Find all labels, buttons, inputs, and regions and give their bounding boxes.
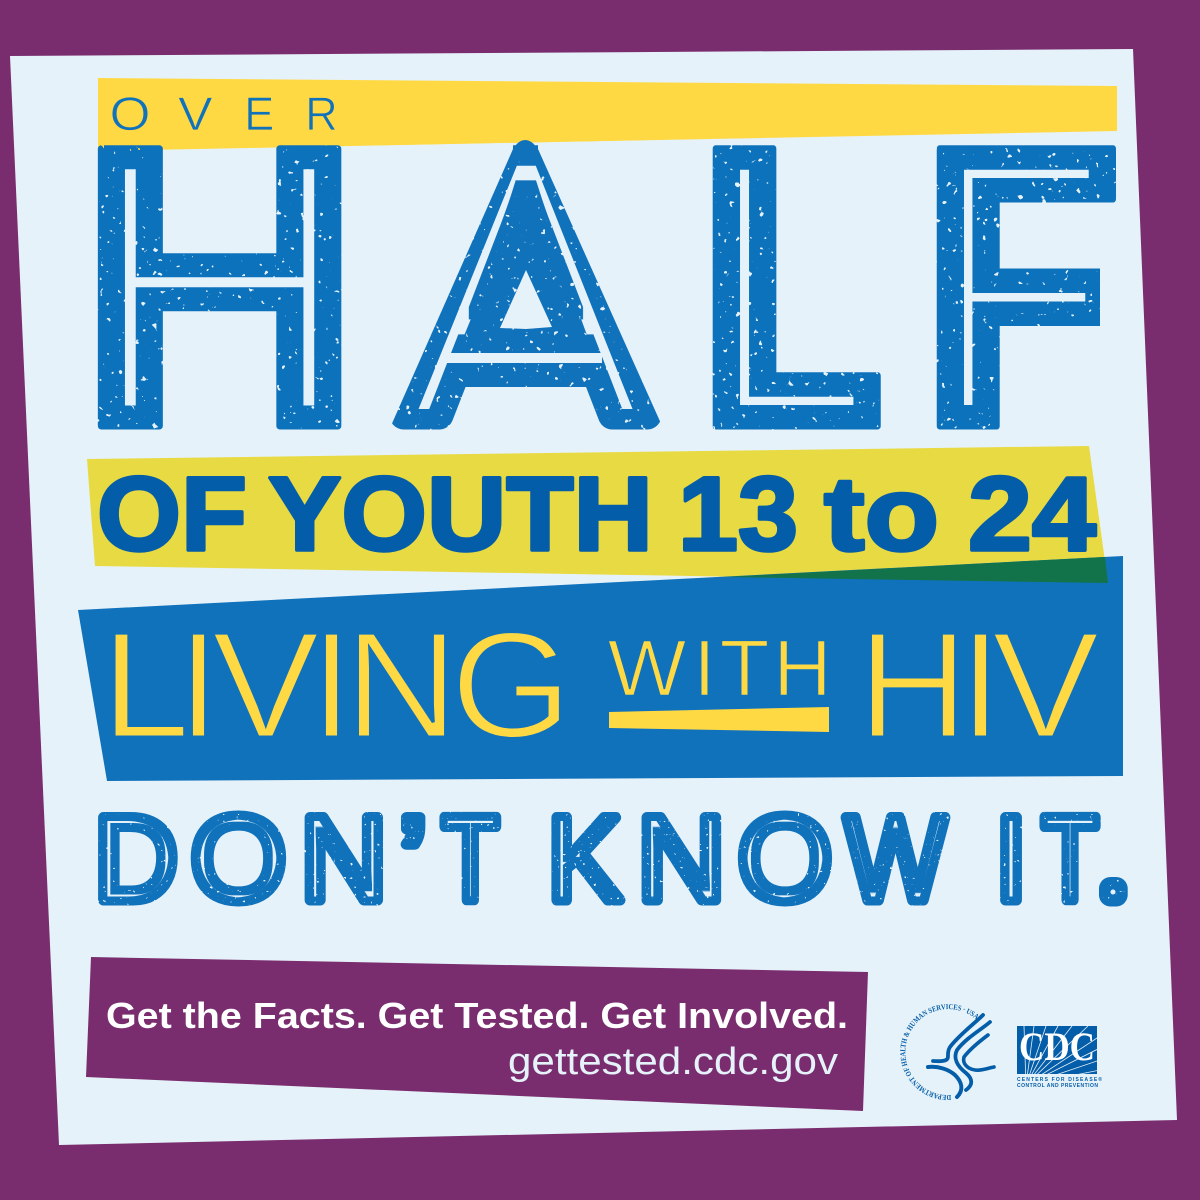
eagle xyxy=(928,1015,994,1097)
heading: DON'T KNOW IT.: K xyxy=(547,792,622,926)
heading: HALF: H xyxy=(81,79,358,494)
heading: DON'T KNOW IT.: O xyxy=(738,792,832,926)
text: slogan: Get the Facts. Get Tested. Get Involved. xyxy=(106,995,848,1036)
heading: HALF: A xyxy=(403,79,650,494)
heading: HALF: L xyxy=(706,79,873,494)
text: HIV: I xyxy=(960,600,1002,769)
seal ring text: DEPARTMENT OF HEALTH & HUMAN SERVICES · USA xyxy=(900,1004,978,1100)
heading: DON'T KNOW IT. xyxy=(94,792,1122,926)
text: OF YOUTH 13 to 24: OF xyxy=(97,456,247,573)
heading: DON'T KNOW IT.: D xyxy=(94,792,178,926)
heading: HALF: F xyxy=(930,79,1110,494)
logo caption line 2: CONTROL AND PREVENTION xyxy=(1017,1083,1098,1089)
band overlap: green wedge xyxy=(724,557,1108,583)
band: yellow-green behind OF YOUTH xyxy=(87,446,1108,583)
heading: DON'T KNOW IT.: I xyxy=(995,792,1027,926)
band: yellow behind OVER xyxy=(98,78,1117,151)
heading: DON'T KNOW IT.: N xyxy=(637,792,726,926)
heading: DON'T KNOW IT.: W xyxy=(845,792,946,926)
heading: DON'T KNOW IT.: O xyxy=(190,792,286,926)
heading: HALF xyxy=(81,79,1110,494)
text: LIVING: G xyxy=(451,600,572,769)
text: OVER: R xyxy=(305,87,338,140)
heading: DON'T KNOW IT.: I xyxy=(995,792,1027,926)
text: OF YOUTH 13 to 24: to xyxy=(824,456,939,573)
heading: HALF: H xyxy=(81,79,358,494)
heading: DON'T KNOW IT.: . xyxy=(1105,841,1122,908)
heading: HALF: A xyxy=(403,79,650,494)
text: HIV: V xyxy=(992,600,1100,769)
heading: DON'T KNOW IT.: T xyxy=(1042,792,1098,926)
underline bar under WITH xyxy=(609,707,829,732)
heading: HALF: L xyxy=(706,79,873,494)
text: LIVING: I xyxy=(178,600,220,769)
text: OVER: O xyxy=(110,87,150,140)
text: OVER: E xyxy=(244,87,274,140)
band: blue behind LIVING WITH HIV xyxy=(78,556,1123,781)
heading: DON'T KNOW IT.: N xyxy=(300,792,387,926)
text: LIVING: V xyxy=(212,600,320,769)
text: OVER: V xyxy=(178,87,213,140)
text: WITH: T xyxy=(720,624,769,712)
text: HIV: H xyxy=(858,600,968,769)
heading: DON'T KNOW IT.: N xyxy=(300,792,387,926)
heading: HALF: L xyxy=(706,79,873,494)
heading: HALF: A xyxy=(403,79,650,494)
panel: call to action xyxy=(86,957,868,1111)
logo letters: CDC xyxy=(1019,1024,1095,1069)
heading: DON'T KNOW IT.: K xyxy=(547,792,622,926)
text: WITH: I xyxy=(693,624,716,712)
text: OF YOUTH 13 to 24: 24 xyxy=(968,456,1096,573)
logo: HHS seal xyxy=(900,1004,996,1100)
heading: HALF: F xyxy=(930,79,1110,494)
heading: HALF: F xyxy=(930,79,1110,494)
heading: DON'T KNOW IT.: W xyxy=(845,792,946,926)
heading: DON'T KNOW IT.: N xyxy=(637,792,726,926)
heading: HALF: H xyxy=(81,79,358,494)
heading: DON'T KNOW IT.: O xyxy=(738,792,832,926)
text: LIVING: I xyxy=(310,600,352,769)
text: WITH: W xyxy=(608,624,687,712)
heading: DON'T KNOW IT.: D xyxy=(94,792,178,926)
text: LIVING: L xyxy=(101,600,190,769)
text: LIVING: N xyxy=(344,600,458,769)
logo rays xyxy=(1024,1026,1097,1074)
logo: CDC xyxy=(1017,1024,1102,1089)
heading: DON'T KNOW IT.: O xyxy=(190,792,286,926)
A outline taper, apex and F arm trim xyxy=(380,140,1116,428)
heading: DON'T KNOW IT.: T xyxy=(442,792,497,926)
heading: DON'T KNOW IT.: T xyxy=(1042,792,1098,926)
text: OF YOUTH 13 to 24: YOUTH xyxy=(268,456,653,573)
heading: DON'T KNOW IT.: T xyxy=(442,792,497,926)
heading: DON'T KNOW IT.: ’ xyxy=(398,792,428,926)
text: OF YOUTH 13 to 24: 13 xyxy=(678,456,798,573)
logo caption: CENTERS FOR DISEASE® xyxy=(1017,1076,1102,1083)
text: WITH: H xyxy=(773,624,832,712)
text: url: gettested.cdc.gov xyxy=(508,1041,838,1083)
